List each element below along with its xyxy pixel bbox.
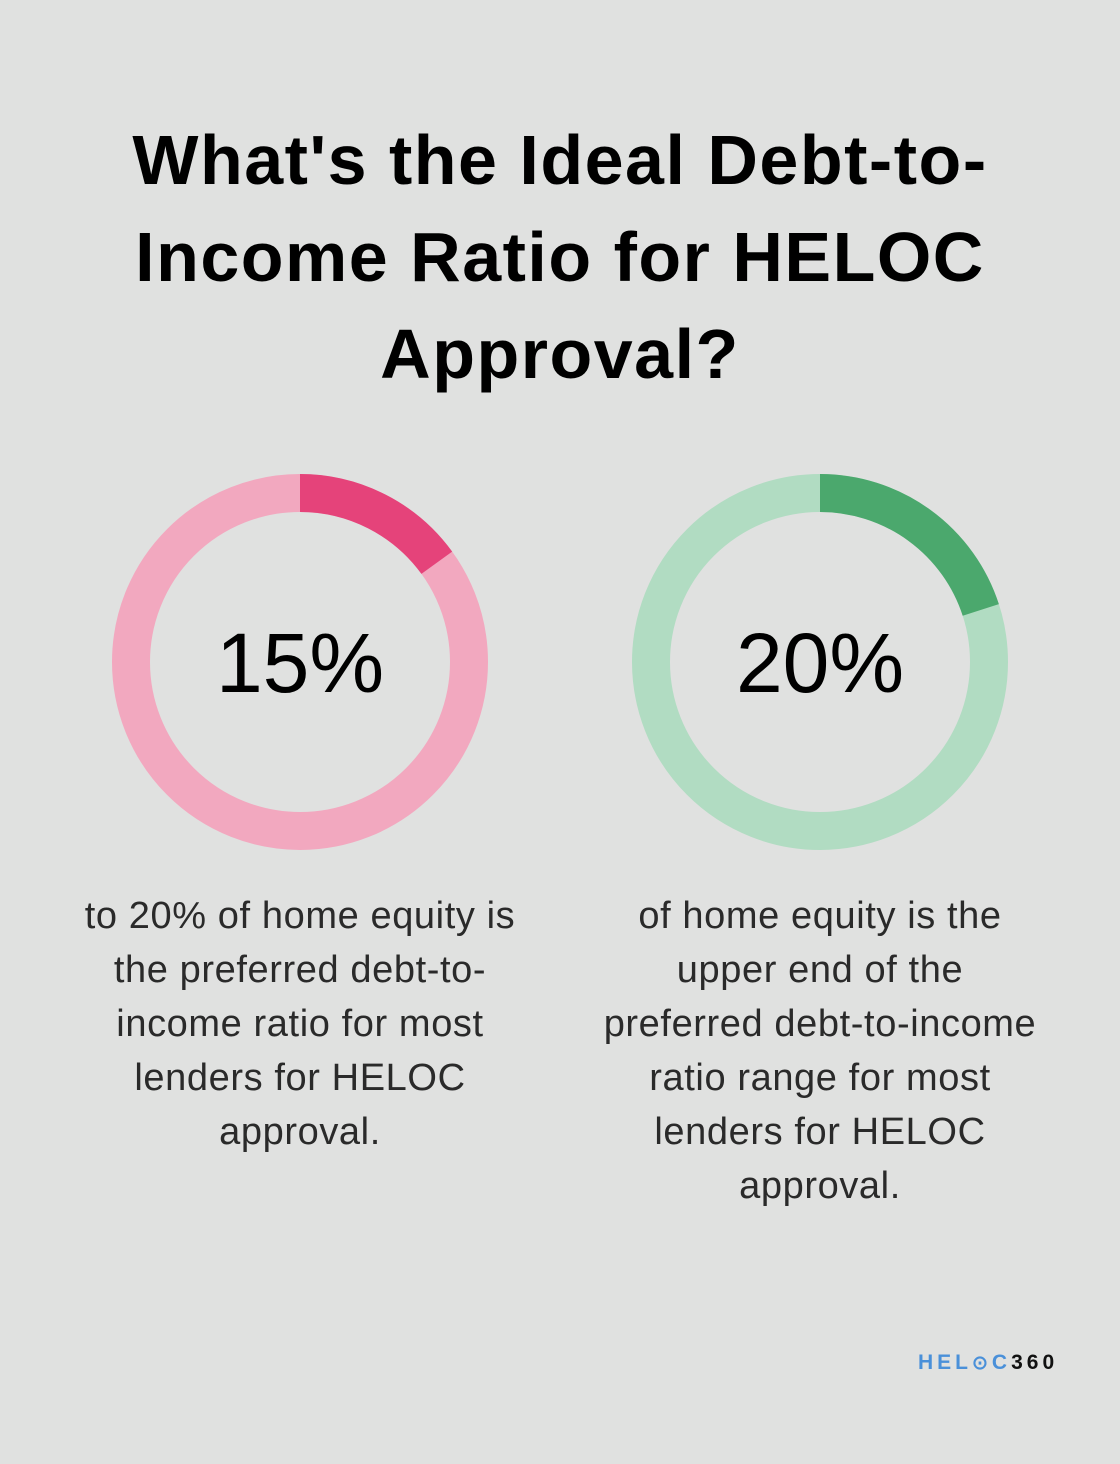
text: 15% description: to 20% of home equity is [85, 895, 515, 937]
logo: HEL⊙C360 [918, 1351, 1058, 1374]
title [132, 121, 988, 393]
donut chart: 15% [112, 474, 488, 850]
stat: 15%: 15% [216, 616, 384, 710]
text: 20% description: approval. [739, 1165, 901, 1207]
text: 20% description: upper end of the [677, 949, 963, 991]
text: 15% description [85, 895, 515, 1153]
text: 20% description: ratio range for most [649, 1057, 991, 1099]
text: 20% description [604, 895, 1036, 1207]
text: 20% description: lenders for HELOC [654, 1111, 986, 1153]
donut chart: 20% [632, 474, 1008, 850]
title: Approval? [380, 315, 740, 393]
stat: 20%: 20% [736, 616, 904, 710]
text: 20% description: of home equity is the [638, 895, 1002, 937]
text: 20% description: preferred debt-to-income [604, 1003, 1036, 1045]
text: 15% description: approval. [219, 1111, 381, 1153]
text: 15% description: income ratio for most [116, 1003, 484, 1045]
text: 15% description: the preferred debt-to- [114, 949, 486, 991]
title: Income Ratio for HELOC [135, 218, 985, 296]
text: 15% description: lenders for HELOC [134, 1057, 466, 1099]
title: What's the Ideal Debt-to- [132, 121, 988, 199]
